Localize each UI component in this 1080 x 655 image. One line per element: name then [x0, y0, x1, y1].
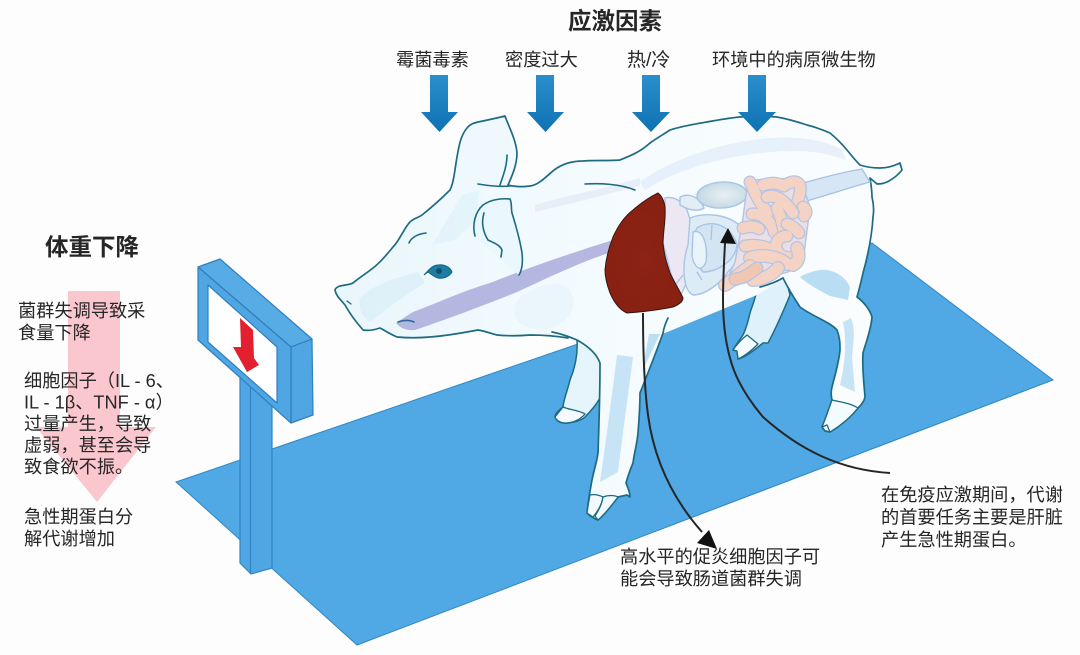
floor platform [176, 243, 1053, 645]
callout arrow: liver acute phase protein [720, 228, 890, 473]
text: acute phase protein catabolism: 急性期蛋白分 [24, 507, 133, 527]
pig head details [347, 155, 635, 322]
near ear [474, 199, 522, 275]
weighing scale [198, 259, 313, 574]
label: heat cold: 热/冷 [627, 49, 670, 71]
pig eye [424, 265, 452, 278]
intestines [722, 178, 810, 290]
pig body fill [335, 116, 902, 520]
text: cytokine callout: 高水平的促炎细胞因子可 [620, 547, 820, 567]
body shading [359, 120, 855, 482]
arrow: mycotoxin [421, 75, 458, 132]
arrow: heat cold [632, 75, 670, 132]
text: cytokines: 虚弱，甚至会导 [24, 436, 151, 456]
stressor arrows [421, 75, 776, 132]
hooves [555, 335, 858, 520]
text: cytokines: 致食欲不振。 [24, 457, 133, 477]
liver [605, 193, 683, 313]
esophagus tube [396, 240, 613, 330]
text: dysbiosis reduces feed intake: 食量下降 [18, 323, 91, 343]
colon tube [803, 169, 870, 202]
label: density: 密度过大 [505, 50, 578, 70]
text: cytokines: 过量产生，导致 [24, 414, 151, 434]
far hind leg [733, 275, 790, 359]
internal organs [663, 181, 748, 296]
stressor labels [396, 49, 876, 71]
text: cytokine callout: 能会导致肠道菌群失调 [620, 569, 802, 589]
callout arrow: cytokines to gut dysbiosis [643, 313, 717, 549]
pink weight-loss arrow [36, 291, 156, 502]
heading: weight loss: 体重下降 [45, 234, 139, 260]
far front leg [555, 340, 606, 423]
red down arrow on display [233, 318, 259, 372]
arrow: density [527, 75, 564, 132]
pig illustration [335, 116, 902, 520]
arrow: microbes [738, 75, 776, 132]
text: liver callout: 产生急性期蛋白。 [881, 530, 1027, 550]
label: mycotoxin: 霉菌毒素 [396, 50, 469, 70]
title: stress factors: 应激因素 [568, 8, 662, 34]
text: liver callout: 的首要任务主要是肝脏 [881, 508, 1063, 528]
text: dysbiosis reduces feed intake: 菌群失调导致采 [18, 301, 145, 321]
text: liver callout: 在免疫应激期间，代谢 [881, 485, 1063, 505]
scale post [240, 370, 272, 574]
pig outline [335, 116, 902, 520]
text: cytokines: 细胞因子（IL - 6、 [24, 371, 174, 391]
text: acute phase protein catabolism: 解代谢增加 [24, 529, 115, 549]
label: microbes: 环境中的病原微生物 [712, 50, 876, 70]
text: cytokines: IL - 1β、TNF - α） [24, 392, 174, 412]
scale display frame [198, 259, 313, 423]
